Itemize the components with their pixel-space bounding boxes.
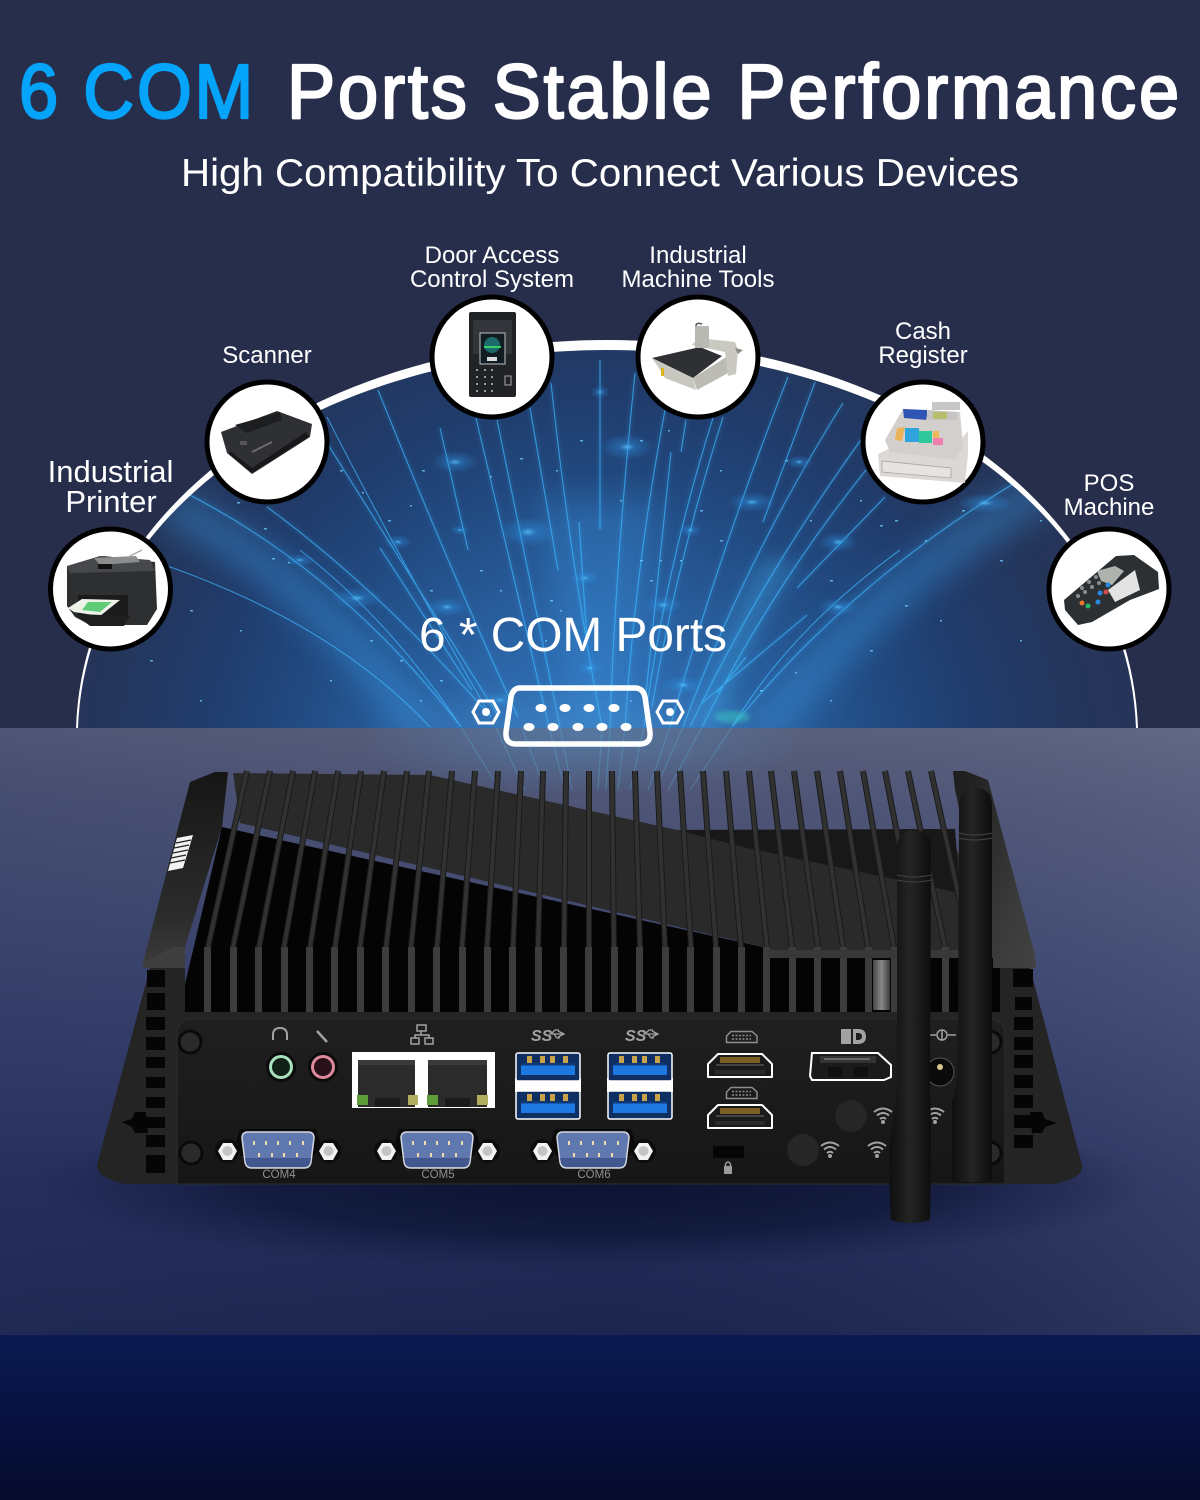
heatsink: lower fin bars (204, 947, 993, 1015)
USB ports left stack (515, 1053, 581, 1119)
white arc linking the devices (76, 340, 1138, 728)
icon: network (411, 1025, 433, 1044)
DisplayPort port (810, 1053, 891, 1080)
COM4 port: COM4 (262, 1169, 296, 1181)
label: Industrial Machine Tools: Industrial (649, 242, 747, 269)
label: Cash Register: Register (878, 342, 968, 369)
side vents left (122, 970, 165, 1173)
icon: industrial printer in circle (50, 529, 170, 649)
COM6 port (530, 1129, 656, 1181)
side vents right (1013, 969, 1057, 1148)
COM6 port: COM6 (577, 1169, 611, 1181)
label: Door Access Control System: Control System (410, 266, 574, 293)
central heading: 6 * COM Ports: 6 * COM Ports (419, 609, 727, 662)
icon: headphone (273, 1028, 287, 1040)
screws (179, 1031, 1001, 1164)
icon: microphone (317, 1031, 327, 1042)
Kensington lock slot (713, 1146, 744, 1174)
LAN ports (352, 1052, 495, 1108)
subtitle: High Compatibility To Connect Various Devices (181, 152, 1019, 195)
COM4 port (215, 1129, 341, 1181)
antenna knockouts and wifi icons (787, 1100, 944, 1166)
heatsink: fins (208, 771, 970, 947)
DC power jack (926, 1030, 956, 1086)
left wing of case (143, 772, 228, 968)
COM5 port: COM5 (421, 1169, 455, 1181)
label: Industrial Printer: Printer (65, 484, 157, 519)
table surface (0, 675, 1200, 1335)
icon: scanner in circle (207, 382, 327, 502)
icon: SuperSpeed USB left (531, 1028, 564, 1045)
right wing of case (953, 771, 1036, 968)
label: Scanner: Scanner (222, 342, 312, 369)
heatsink: black cavity behind fins (178, 827, 1000, 1014)
COM5 port (374, 1129, 500, 1181)
icon: SuperSpeed USB left: SS (531, 1028, 553, 1045)
DisplayPort icon (841, 1029, 866, 1044)
USB ports right stack (607, 1053, 673, 1119)
device shadow on table (30, 1100, 1150, 1270)
HDMI ports and icons (708, 1032, 772, 1128)
icon: door access terminal in circle (432, 297, 552, 417)
audio jacks (266, 1052, 338, 1082)
front antenna (889, 830, 931, 1223)
icon: serial port connector (473, 688, 683, 744)
icon: POS terminal in circle (1049, 529, 1169, 649)
heatsink: grey cylinder behind antenna (873, 960, 890, 1010)
rear I/O panel (177, 1019, 1005, 1184)
icon: machine tool in circle (638, 297, 758, 417)
label: Industrial Machine Tools: Machine Tools (622, 266, 774, 293)
label: Industrial Printer: Industrial (48, 454, 173, 489)
blue light dome with fan of rays (77, 345, 1137, 728)
icon: cash register in circle (863, 382, 983, 502)
background: navy upper wall (0, 0, 1200, 729)
icon: SuperSpeed USB right (625, 1028, 658, 1045)
heatsink: slanted roof (233, 773, 993, 958)
icon: SuperSpeed USB right: SS (625, 1028, 647, 1045)
dark floor band (0, 1335, 1200, 1500)
label: POS Machine: POS (1084, 470, 1134, 497)
case body (97, 968, 1082, 1184)
label: Cash Register: Cash (895, 318, 951, 345)
mini PC device (97, 771, 1082, 1223)
back antenna (952, 788, 992, 1182)
label: POS Machine: Machine (1064, 494, 1154, 521)
label: Door Access Control System: Door Access (425, 242, 559, 269)
title: 6 COM (19, 49, 256, 135)
